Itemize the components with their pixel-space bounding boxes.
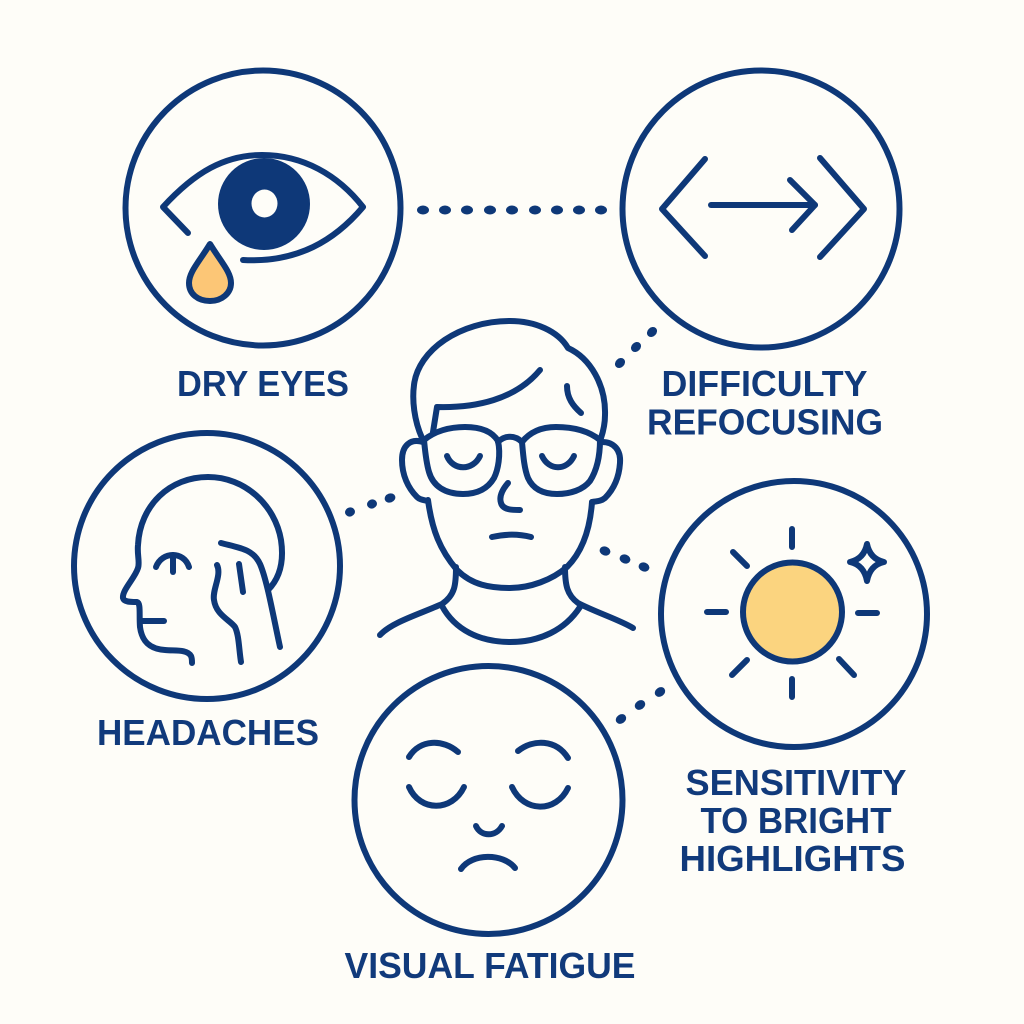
central person [380, 321, 633, 642]
icon: sun [707, 529, 877, 697]
dry eyes circle [126, 70, 400, 346]
panel: sensitivity [661, 481, 927, 879]
headaches circle [74, 433, 340, 699]
head and hair [413, 321, 605, 438]
panel: visual fatigue [344, 666, 636, 986]
connector: person to sensitivity [598, 545, 651, 573]
refocusing circle [622, 70, 900, 348]
icon: head in profile [123, 477, 282, 663]
jaw [428, 500, 592, 588]
icon: tired face [409, 743, 568, 869]
label: sensitivity: SENSITIVITY [686, 762, 906, 803]
sensitivity circle [661, 481, 927, 747]
connector: person to refocusing [613, 325, 659, 370]
icon: arrows [662, 158, 864, 257]
label: sensitivity [680, 762, 906, 879]
label: visual fatigue: VISUAL FATIGUE [344, 945, 636, 986]
nose and mouth [500, 483, 520, 510]
label: difficulty refocusing: REFOCUSING [647, 402, 883, 442]
glasses [424, 427, 600, 494]
label: difficulty refocusing: DIFFICULTY [662, 363, 868, 404]
connector: fatigue to sensitivity [614, 685, 667, 726]
panel: dry eyes [126, 70, 400, 404]
icon: eye [163, 155, 363, 260]
label: headaches: HEADACHES [97, 712, 319, 753]
connector: person to headaches [344, 492, 397, 518]
ears [402, 441, 428, 501]
label: difficulty refocusing [647, 363, 883, 442]
panel: difficulty refocusing [622, 70, 900, 442]
label: sensitivity: HIGHLIGHTS [680, 838, 906, 879]
label: dry eyes: DRY EYES [177, 363, 349, 404]
neck and shoulders [380, 567, 456, 635]
panel: headaches [74, 433, 340, 753]
icon: tear drop [189, 244, 231, 301]
fatigue circle [354, 666, 622, 934]
icon: sparkle [850, 544, 884, 581]
connector: dry eyes to refocusing [417, 206, 607, 214]
closed eyes [447, 456, 480, 467]
label: sensitivity: TO BRIGHT [700, 800, 892, 841]
